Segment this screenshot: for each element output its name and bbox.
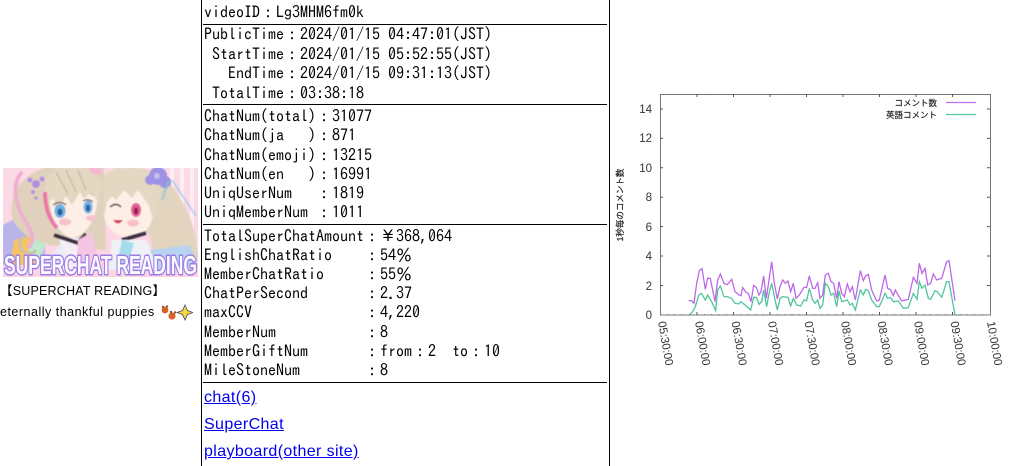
line series: total comments — [689, 261, 955, 303]
x axis labels: 09:30:00 — [948, 320, 967, 367]
x axis labels: 08:30:00 — [875, 320, 894, 367]
time block: StartTime：2024/01/15 05:52:55(JST) — [212, 46, 492, 62]
stream title line 2: eternally thankful puppies — [0, 305, 155, 319]
y axis labels: 10 — [639, 163, 652, 175]
y axis labels: 14 — [639, 104, 653, 116]
y axis labels — [639, 104, 653, 322]
superchat and ratio block: MemberNum ：8 — [204, 324, 388, 340]
x axis labels: 07:30:00 — [802, 320, 821, 367]
time block: TotalTime：03:38:18 — [212, 85, 364, 101]
time block: EndTime：2024/01/15 09:31:13(JST) — [228, 65, 492, 81]
chat count block: ChatNum(total)：31077 — [204, 108, 372, 124]
x axis labels: 06:30:00 — [729, 320, 748, 367]
time block: PublicTime：2024/01/15 04:47:01(JST) — [204, 26, 492, 42]
panel: thumbnail and stream title — [0, 168, 198, 321]
line series: English comments — [689, 282, 955, 315]
superchat and ratio block: TotalSuperChatAmount：￥368,064 — [204, 228, 452, 244]
legend: コメント数 — [894, 98, 937, 108]
y axis labels: 4 — [646, 251, 653, 263]
stream title line 1: 【SUPERCHAT READING】 — [0, 280, 165, 299]
chat count block: ChatNum(emoji)：13215 — [204, 147, 372, 163]
y axis labels: 6 — [646, 222, 652, 234]
links: playboard(other site) — [204, 443, 359, 460]
chat count block: UniqMemberNum ：1011 — [204, 204, 364, 220]
superchat and ratio block: MemberChatRatio ：55％ — [204, 266, 412, 282]
thumbnail illustration — [3, 168, 198, 277]
chat count block: ChatNum(en )：16991 — [204, 166, 372, 182]
y axis title: 1秒毎のコメント数 — [615, 168, 625, 241]
x axis labels — [655, 320, 1004, 367]
superchat and ratio block: ChatPerSecond ：2.37 — [204, 285, 412, 301]
panel: stream statistics — [201, 0, 610, 466]
superchat and ratio block: MemberGiftNum ：from：2 to：10 — [204, 343, 500, 359]
y axis labels: 2 — [646, 281, 652, 293]
icon: paw and sparkle emoji — [162, 304, 193, 321]
plot frame — [660, 94, 990, 315]
links — [204, 389, 359, 460]
x axis labels: 07:00:00 — [765, 320, 785, 367]
y axis labels: 8 — [646, 192, 652, 204]
time block — [204, 26, 492, 101]
links: SuperChat — [204, 416, 284, 433]
superchat and ratio block — [204, 228, 500, 378]
video id: videoID：Lg3MHM6fm0k — [204, 4, 364, 20]
chat count block — [204, 108, 372, 220]
links: chat(6) — [204, 389, 256, 406]
y axis labels: 0 — [646, 310, 652, 322]
superchat and ratio block: EnglishChatRatio ：54％ — [204, 247, 412, 263]
superchat and ratio block: MileStoneNum ：8 — [204, 362, 388, 378]
x axis labels: 05:30:00 — [655, 320, 675, 367]
chart: comments per minute — [615, 94, 1004, 367]
x axis labels: 08:00:00 — [838, 320, 858, 367]
y axis labels: 12 — [639, 133, 652, 145]
x axis labels: 09:00:00 — [911, 320, 931, 367]
chat count block: ChatNum(ja )：871 — [204, 127, 356, 143]
superchat and ratio block: maxCCV ：4,220 — [204, 304, 420, 320]
legend — [886, 98, 976, 120]
chat count block: UniqUserNum ：1819 — [204, 185, 364, 201]
x axis labels: 10:00:00 — [984, 320, 1004, 367]
axis ticks — [660, 94, 990, 315]
x axis labels: 06:00:00 — [692, 320, 712, 367]
legend: 英語コメント — [886, 110, 937, 120]
